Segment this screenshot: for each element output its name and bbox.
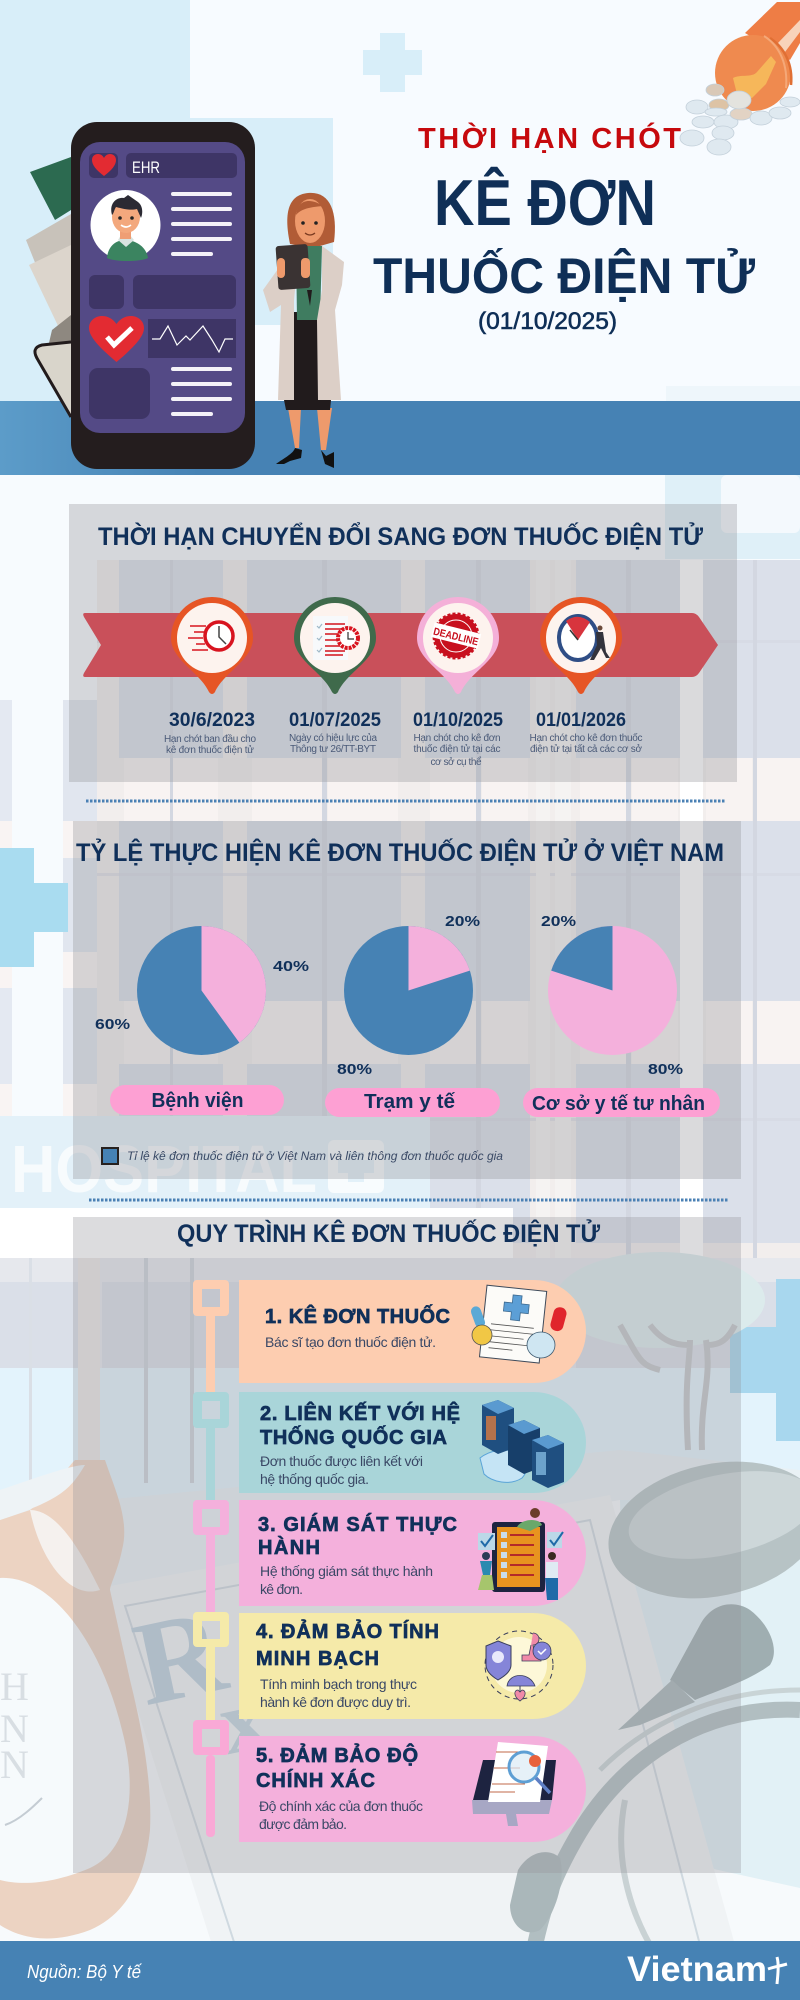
label pill: hospitals: Bệnh viện <box>152 1090 244 1112</box>
pin 3: deadline stamp <box>417 597 499 694</box>
pie chart: health stations <box>337 913 480 1078</box>
step 3 card: HÀNH <box>258 1536 320 1559</box>
title: THUỐC ĐIỆN TỬ <box>373 247 755 304</box>
milestone 2: Ngày có hiệu lực của <box>289 732 377 744</box>
panel: transition timeline <box>69 504 737 782</box>
step 5 card: được đảm bảo. <box>259 1816 347 1832</box>
photo: Rx prescription lettering: R <box>123 1582 237 1731</box>
heading: timeline: THỜI HẠN CHUYỂN ĐỔI SANG ĐƠN THUỐC ĐIỆN TỬ <box>98 521 703 551</box>
icon: shield, stamp and umbrella <box>485 1631 553 1701</box>
step 2 card: Đơn thuốc được liên kết với <box>260 1453 423 1469</box>
heartbeat chart tile <box>148 319 236 358</box>
step 2 card: 2. LIÊN KẾT VỚI HỆ <box>260 1401 460 1425</box>
photo: pill bottle at lower left: H <box>0 1664 29 1709</box>
logo: Vietnam+: Vietnam <box>627 1950 767 1989</box>
ribbon arrow <box>83 613 718 677</box>
step 3 card: 3. GIÁM SÁT THỰC <box>258 1513 457 1536</box>
step 2 card: hệ thống quốc gia. <box>260 1471 369 1487</box>
label pill: private facilities <box>523 1088 720 1117</box>
step 1 card <box>239 1280 586 1383</box>
pie chart: private facilities <box>541 913 683 1078</box>
step 1 card: Bác sĩ tạo đơn thuốc điện tử. <box>265 1334 436 1350</box>
pie chart: hospitals <box>95 926 309 1055</box>
footer band <box>0 1941 800 2000</box>
milestone 2: Thông tư 26/TT-BYT <box>290 744 376 755</box>
title: THỜI HẠN CHÓT <box>418 121 681 155</box>
background: hospital facade and medical photo <box>0 475 800 1945</box>
photo: Rx prescription lettering: x <box>211 1668 276 1774</box>
milestone 4 <box>530 710 642 755</box>
milestone 4: điện tử tại tất cả các cơ sở <box>530 743 642 755</box>
source: Nguồn: Bộ Y tế <box>27 1962 143 1982</box>
heading: process: QUY TRÌNH KÊ ĐƠN THUỐC ĐIỆN TỬ <box>177 1218 600 1248</box>
step 3 card: Hệ thống giám sát thực hành <box>260 1563 433 1579</box>
icon: prescription and pills <box>470 1285 568 1363</box>
pie chart: private facilities: 80% <box>648 1061 683 1078</box>
step 4 card: MINH BẠCH <box>256 1648 379 1670</box>
heart with check <box>89 316 144 362</box>
icon: team with checklist board <box>478 1508 563 1600</box>
step 3 card <box>239 1500 586 1606</box>
legend: Tỉ lệ kê đơn thuốc điện tử ở Việt Nam và liên thông đơn thuốc quốc gia <box>127 1149 503 1163</box>
step 4 card: Tính minh bạch trong thực <box>260 1676 417 1692</box>
step 3 card: kê đơn. <box>260 1581 303 1597</box>
step 2 card <box>239 1392 586 1493</box>
timeline connector nodes <box>193 1280 229 1837</box>
icon: servers and cloud <box>480 1400 564 1488</box>
icon: orange pill bottle with spilled pills <box>680 2 800 155</box>
milestone 4: Hạn chót cho kê đơn thuốc <box>530 732 642 744</box>
milestone 4: 01/01/2026 <box>536 710 626 731</box>
EHR header tile <box>89 153 237 178</box>
milestone 3: cơ sở cụ thể <box>430 756 482 768</box>
step 5 card: CHÍNH XÁC <box>256 1769 375 1792</box>
milestone 2: 01/07/2025 <box>289 710 381 731</box>
heading: rates: TỶ LỆ THỰC HIỆN KÊ ĐƠN THUỐC ĐIỆN TỬ Ở VIỆT NAM <box>76 837 724 867</box>
title: KÊ ĐƠN <box>434 166 656 239</box>
label pill: hospitals <box>110 1085 284 1115</box>
photo: Rx prescription lettering <box>123 1577 276 1789</box>
pin 4: man pushing clock <box>540 597 622 694</box>
pie chart: health stations: 20% <box>445 913 480 930</box>
step 5 card: 5. ĐẢM BẢO ĐỘ <box>256 1743 418 1767</box>
pie chart: health stations: 80% <box>337 1061 372 1078</box>
panel: e-prescribing process <box>73 1217 741 1873</box>
EHR header tile: EHR <box>132 158 160 177</box>
label pill: health stations <box>325 1088 500 1117</box>
icon: female doctor holding tablet <box>263 193 344 468</box>
pin 1: speeding clock <box>171 597 253 694</box>
pin 2: checklist with clock <box>294 597 376 694</box>
photo: stethoscope <box>510 1443 800 1945</box>
background: large plus crosses <box>0 848 800 1441</box>
pie chart: hospitals: 40% <box>273 958 309 975</box>
photo: pill bottle at lower left <box>0 1460 150 1938</box>
step 1 card: 1. KÊ ĐƠN THUỐC <box>265 1304 450 1328</box>
icon: monitor with magnifying glass <box>472 1742 556 1826</box>
label pill: health stations: Trạm y tế <box>364 1091 456 1113</box>
milestone 3 <box>413 710 503 768</box>
patient avatar <box>90 190 160 261</box>
pie chart: private facilities: 20% <box>541 913 576 930</box>
milestone 1 <box>164 710 256 756</box>
milestone 2 <box>289 710 381 755</box>
step 5 card: Độ chính xác của đơn thuốc <box>259 1798 423 1814</box>
hero background <box>0 0 800 475</box>
photo: pill bottle at lower left: N <box>0 1706 29 1751</box>
photo: pill bottle at lower left: N <box>0 1742 29 1787</box>
milestone 3: 01/10/2025 <box>413 710 503 731</box>
hospital sign text: HOSPITAL <box>11 1132 317 1207</box>
panel: e-prescribing rates <box>73 821 741 1179</box>
title: (01/10/2025) <box>478 308 617 335</box>
milestone 3: Hạn chót cho kê đơn <box>414 733 500 744</box>
tree behind the process panel <box>555 1252 765 1450</box>
milestone 3: thuốc điện tử tại các <box>414 743 500 755</box>
step 4 card: 4. ĐẢM BẢO TÍNH <box>256 1620 439 1643</box>
icon: smartphone with EHR record <box>71 122 255 469</box>
info lines <box>171 192 232 256</box>
pin 3: deadline stamp: DEADLINE <box>432 626 480 648</box>
milestone 1: kê đơn thuốc điện tử <box>166 744 254 756</box>
label pill: private facilities: Cơ sở y tế tư nhân <box>532 1093 705 1115</box>
title <box>373 121 755 335</box>
step 2 card: THỐNG QUỐC GIA <box>260 1425 447 1449</box>
step 4 card: hành kê đơn được duy trì. <box>260 1694 411 1710</box>
milestone 1: 30/6/2023 <box>169 710 255 731</box>
icon: medical papers behind phone <box>26 157 71 417</box>
step 5 card <box>239 1736 586 1842</box>
milestone 1: Hạn chót ban đầu cho <box>164 733 256 745</box>
pie chart: hospitals: 60% <box>95 1016 130 1033</box>
step 4 card <box>239 1613 586 1719</box>
